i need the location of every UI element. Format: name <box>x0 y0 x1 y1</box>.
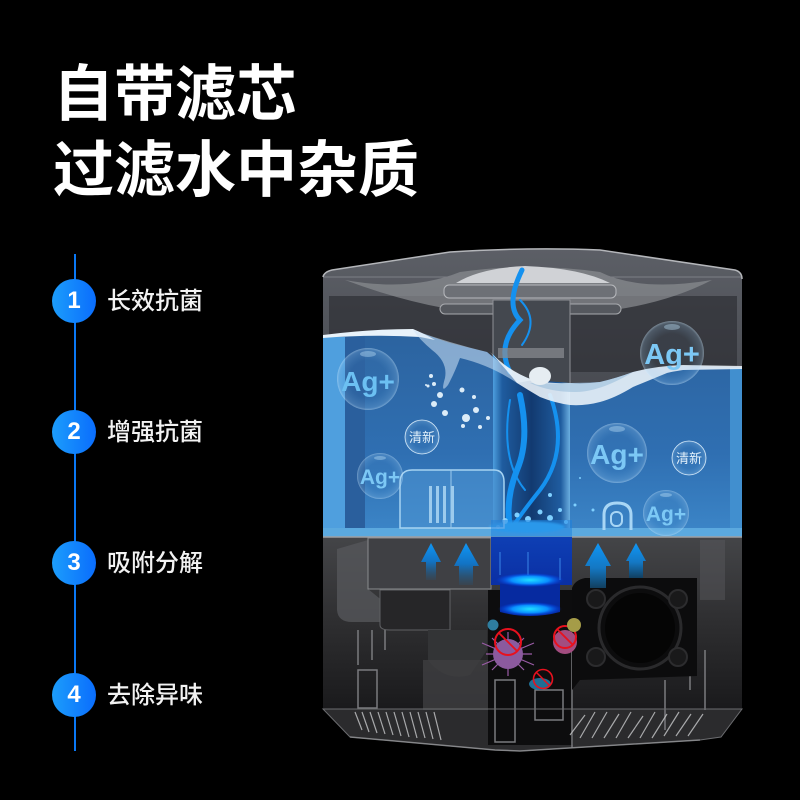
timeline line <box>74 254 76 751</box>
feature 4: 去除异味 <box>107 682 203 709</box>
upward arrow 4 <box>626 543 646 578</box>
base ribs <box>350 712 703 751</box>
upward arrow 1 <box>421 543 441 580</box>
Ag+ bubble 3: Ag+ <box>590 439 644 470</box>
feature 3 <box>52 541 203 585</box>
Ag+ bubble 2: Ag+ <box>644 339 700 371</box>
Ag+ bubble 2 <box>640 321 704 385</box>
blue light chamber <box>491 520 572 616</box>
feature 2 <box>52 410 203 454</box>
feature 3: 3 <box>67 549 81 576</box>
filter cartridge in water <box>400 470 504 528</box>
Ag+ bubble 4 <box>357 453 403 499</box>
float valve <box>604 503 631 530</box>
germ: blue <box>488 620 498 630</box>
water splash at column base <box>489 477 594 533</box>
germ: pink blocked <box>553 626 577 654</box>
lower chamber <box>323 537 742 751</box>
upward arrow 3 <box>585 543 611 588</box>
feature 3: 吸附分解 <box>107 550 203 577</box>
feature 2: 增强抗菌 <box>107 419 203 446</box>
Ag+ bubble 5: Ag+ <box>646 503 686 526</box>
feature 1: 长效抗菌 <box>107 288 203 315</box>
Ag+ bubble 4: Ag+ <box>360 466 400 489</box>
water wave surface <box>323 329 742 405</box>
motor <box>572 578 697 690</box>
germ: purple blocked <box>482 629 534 676</box>
title: 过滤水中杂质 <box>53 136 419 204</box>
feature 1: 1 <box>67 287 81 314</box>
feature 4: 4 <box>67 681 81 708</box>
feature 1 <box>52 279 203 323</box>
title <box>53 60 419 204</box>
Ag+ bubble 1: Ag+ <box>341 366 395 397</box>
water flow in column <box>505 270 558 528</box>
fresh bubble 2 <box>672 441 706 475</box>
water droplets <box>425 374 490 429</box>
feature 4 <box>52 673 203 717</box>
feature 2: 2 <box>67 418 81 445</box>
Ag+ bubble 1 <box>337 348 399 410</box>
fresh bubble 1 <box>405 420 439 454</box>
Ag+ bubble 3 <box>587 423 647 483</box>
fresh bubble 2: 清新 <box>676 451 702 466</box>
fresh bubble 1: 清新 <box>409 430 435 445</box>
water body <box>323 330 742 537</box>
tank upper body <box>323 249 742 540</box>
germ: yellow <box>567 618 581 632</box>
upward arrow 2 <box>454 543 479 585</box>
title: 自带滤芯 <box>53 60 297 128</box>
Ag+ bubble 5 <box>643 490 689 536</box>
germ: teal blocked <box>529 670 552 690</box>
